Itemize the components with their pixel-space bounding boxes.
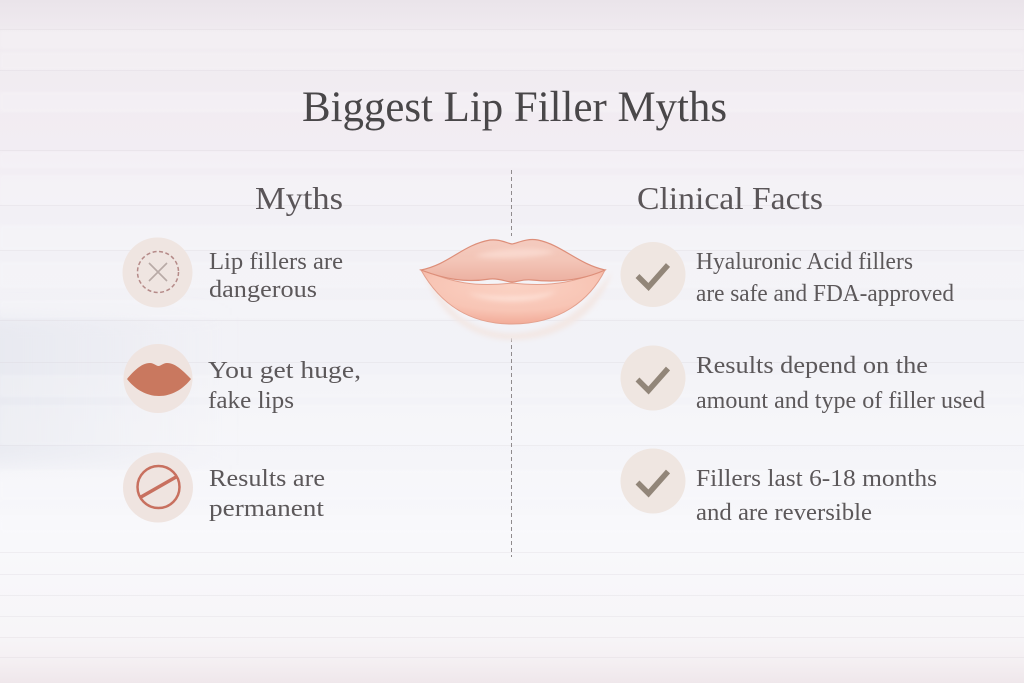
center divider: [510, 170, 512, 557]
myth text 1: dangerous: [209, 277, 317, 303]
fact row 1: [620, 242, 954, 307]
myth text 3: Results are: [209, 466, 325, 492]
heading: clinical facts: Clinical Facts: [637, 180, 823, 216]
fact row 2: [620, 346, 985, 414]
myth row 3: [123, 452, 325, 522]
myth text 2: fake lips: [208, 388, 294, 414]
myth text 1: Lip fillers are: [209, 249, 343, 275]
lips illustration: [421, 240, 612, 340]
icon: solid lips: [124, 344, 192, 413]
myth row 2: [124, 344, 361, 414]
myth text 2: You get huge,: [208, 358, 361, 384]
fact text 3: Fillers last 6-18 months: [696, 466, 937, 492]
title: Biggest Lip Filler Myths: [302, 84, 727, 131]
fact text 1: are safe and FDA-approved: [696, 281, 954, 307]
fact text 2: Results depend on the: [696, 353, 928, 379]
fact text 1: Hyaluronic Acid fillers: [696, 249, 913, 275]
icon: prohibition sign: [123, 452, 193, 522]
icon: check: [620, 346, 686, 410]
fact text 2: amount and type of filler used: [696, 388, 985, 414]
fact row 3: [620, 448, 937, 526]
myth row 1: [122, 238, 343, 308]
heading: myths: Myths: [255, 180, 343, 216]
icon: check: [620, 448, 686, 514]
icon: check: [620, 242, 686, 307]
fact text 3: and are reversible: [696, 500, 872, 526]
icon: dashed circle with x: [122, 238, 192, 308]
myth text 3: permanent: [209, 496, 324, 522]
